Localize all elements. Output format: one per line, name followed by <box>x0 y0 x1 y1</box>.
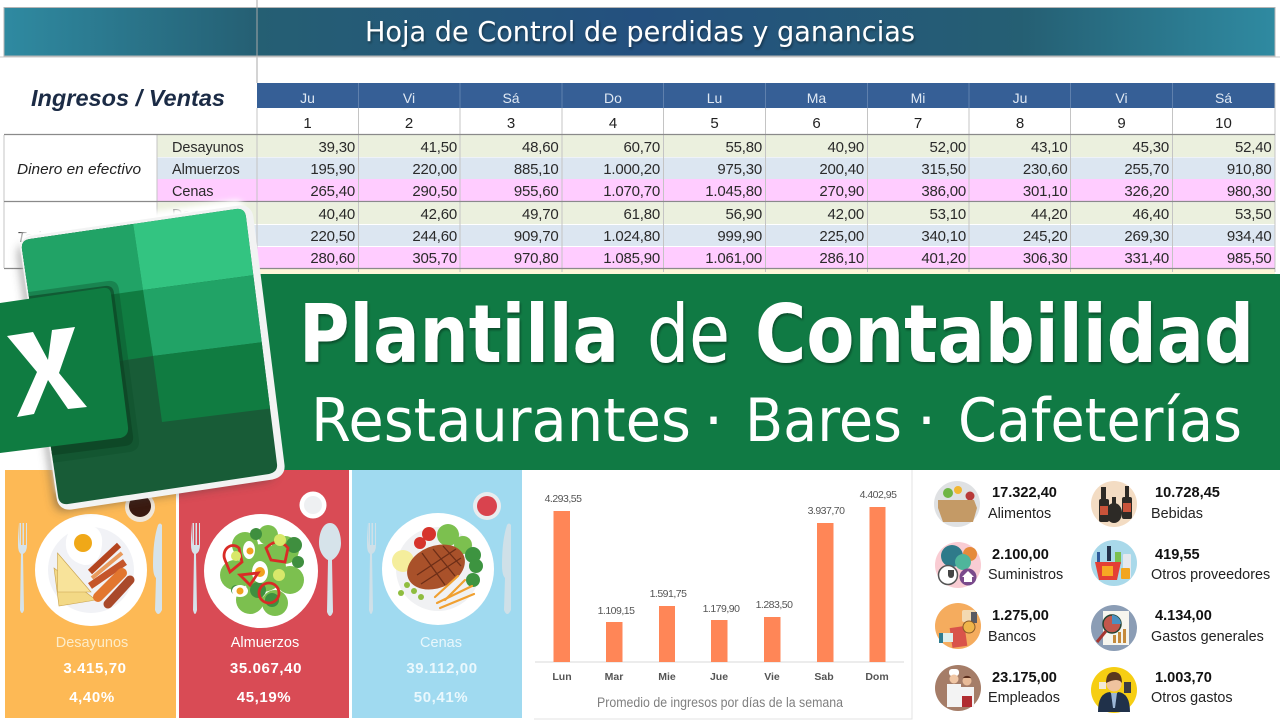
row: efectivo cenas <box>310 183 1272 200</box>
row: efectivo almuerzos: 195,90 <box>310 161 355 178</box>
row: tarjeta almuerzos: 1.024,80 <box>603 228 660 245</box>
label: cenas values: Cenas <box>420 635 462 651</box>
icon: fork <box>191 523 200 614</box>
table header: day numbers: 5 <box>710 115 719 132</box>
item: empleados: 23.175,00 <box>992 670 1057 686</box>
row: efectivo desayunos: 41,50 <box>420 139 457 156</box>
icon: sauce <box>473 492 501 520</box>
bar value labels <box>545 489 897 617</box>
bar value labels: 1.283,50 <box>756 599 793 611</box>
row: tarjeta desayunos: 61,80 <box>623 206 660 223</box>
label: desayunos values: 4,40% <box>69 689 115 706</box>
table header: day numbers <box>303 115 1232 132</box>
banner headline <box>299 288 1254 381</box>
item: empleados <box>935 665 1060 711</box>
bar value labels: 4.402,95 <box>860 489 897 501</box>
row: efectivo desayunos: 43,10 <box>1031 139 1068 156</box>
label: cenas values: 39.112,00 <box>406 660 478 677</box>
icon: fork <box>367 523 376 614</box>
banner subtitle: Bares <box>745 386 902 456</box>
label: desayunos values <box>56 635 128 706</box>
row: tarjeta cenas: 286,10 <box>819 250 864 267</box>
label: desayunos values: Desayunos <box>56 635 128 651</box>
row: tarjeta cenas: 305,70 <box>412 250 457 267</box>
table header: days of the week: Ma <box>807 90 826 106</box>
item: suministros: Suministros <box>988 567 1063 583</box>
row: efectivo almuerzos: 975,30 <box>717 161 762 178</box>
row: efectivo desayunos: 52,00 <box>929 139 966 156</box>
item: suministros <box>935 542 1063 588</box>
green banner <box>250 274 1280 470</box>
table header: days of the week: Vi <box>403 90 415 106</box>
row: efectivo desayunos <box>318 139 1272 156</box>
row labels: Almuerzos <box>172 162 240 178</box>
item: alimentos: 17.322,40 <box>992 485 1057 501</box>
row: efectivo almuerzos: 230,60 <box>1023 161 1068 178</box>
row: tarjeta desayunos: 49,70 <box>522 206 558 223</box>
icon: knife <box>502 524 511 614</box>
banner headline: de <box>647 288 730 381</box>
item: otros gastos: 1.003,70 <box>1155 670 1212 686</box>
label: almuerzos values: 35.067,40 <box>230 660 302 677</box>
row: tarjeta cenas: 985,50 <box>1227 250 1272 267</box>
panel: cenas <box>352 470 522 718</box>
heading: ingresos / ventas: Ingresos / Ventas <box>31 85 225 111</box>
table header: day numbers: 9 <box>1117 115 1126 132</box>
icon: spoon <box>319 523 341 616</box>
row: tarjeta desayunos: 42,60 <box>420 206 457 223</box>
label: almuerzos values: Almuerzos <box>231 635 299 651</box>
row: tarjeta almuerzos <box>310 228 1272 245</box>
bar value labels: 4.293,55 <box>545 493 582 505</box>
item: bancos: 1.275,00 <box>992 608 1049 624</box>
row: tarjeta desayunos: 56,90 <box>725 206 762 223</box>
logo x tile <box>0 288 128 453</box>
item: otros gastos <box>1091 667 1233 713</box>
row labels: Desayunos <box>172 140 244 156</box>
row: tarjeta cenas: 1.061,00 <box>705 250 762 267</box>
row: tarjeta cenas: 280,60 <box>310 250 355 267</box>
row: tarjeta desayunos: 42,00 <box>827 206 864 223</box>
chart: promedio de ingresos <box>522 470 912 719</box>
bar value labels: 3.937,70 <box>808 505 845 517</box>
table header: days of the week: Sá <box>1215 90 1232 106</box>
icon: salad plate <box>204 514 318 628</box>
row labels: Cenas <box>172 251 213 267</box>
item: gastos generales <box>1091 605 1264 651</box>
row: tarjeta desayunos: 40,40 <box>318 206 355 223</box>
banner subtitle: Restaurantes <box>311 386 691 456</box>
row group label: tarjeta: Tarjeta <box>17 230 61 246</box>
row: tarjeta cenas: 401,20 <box>921 250 966 267</box>
row: efectivo cenas: 265,40 <box>310 183 355 200</box>
income table <box>4 83 1275 274</box>
item: suministros: 2.100,00 <box>992 547 1049 563</box>
icon: fork <box>18 523 27 613</box>
label: almuerzos values: 45,19% <box>237 689 291 706</box>
axis labels: Sab <box>814 671 834 683</box>
item: otros proveedores <box>1091 540 1270 586</box>
row: efectivo almuerzos <box>310 161 1272 178</box>
row: efectivo cenas: 326,20 <box>1124 183 1169 200</box>
row labels: Almuerzos <box>172 229 240 245</box>
table header: day numbers: 7 <box>914 115 922 132</box>
bar value labels: 1.179,90 <box>703 603 740 615</box>
banner subtitle: · <box>704 386 723 456</box>
label: cenas values <box>406 635 478 706</box>
chart caption: Promedio de ingresos por días de la semana <box>597 695 843 710</box>
row: tarjeta almuerzos: 225,00 <box>819 228 864 245</box>
row: tarjeta cenas: 970,80 <box>514 250 558 267</box>
item: otros gastos: Otros gastos <box>1151 690 1233 706</box>
row: tarjeta almuerzos: 999,90 <box>717 228 762 245</box>
icon: knife <box>153 524 162 614</box>
axis labels: Mar <box>605 671 623 683</box>
banner headline: Plantilla <box>299 288 619 381</box>
label: desayunos values: 3.415,70 <box>63 660 127 677</box>
row: efectivo cenas: 301,10 <box>1023 183 1068 200</box>
row labels <box>172 140 244 267</box>
row labels: Desayunos <box>172 207 244 223</box>
row: efectivo desayunos: 60,70 <box>623 139 660 156</box>
banner subtitle: · <box>917 386 936 456</box>
row: tarjeta almuerzos: 909,70 <box>514 228 558 245</box>
row backgrounds <box>4 83 1275 274</box>
table header: days of the week <box>257 83 1275 108</box>
row: tarjeta desayunos: 53,50 <box>1235 206 1272 223</box>
banner subtitle <box>311 386 1242 456</box>
item: bancos <box>935 603 1049 649</box>
icon: steak plate <box>382 513 494 625</box>
row: tarjeta cenas: 331,40 <box>1124 250 1169 267</box>
table header: day numbers: 6 <box>812 115 821 132</box>
row: tarjeta almuerzos: 245,20 <box>1023 228 1068 245</box>
table header: days of the week: Sá <box>502 90 520 106</box>
table header: day numbers: 3 <box>507 115 515 132</box>
panel: desayunos <box>5 470 176 718</box>
row: efectivo cenas: 386,00 <box>921 183 966 200</box>
item: bebidas: 10.728,45 <box>1155 485 1220 501</box>
axis labels: Dom <box>865 671 889 683</box>
row: efectivo cenas: 1.070,70 <box>603 183 660 200</box>
bars <box>554 507 886 662</box>
row: tarjeta almuerzos: 244,60 <box>412 228 457 245</box>
panel: expense summary <box>934 481 1270 713</box>
row: tarjeta cenas: 1.085,90 <box>603 250 660 267</box>
item: gastos generales: 4.134,00 <box>1155 608 1212 624</box>
row group label: dinero en efectivo: Dinero en efectivo <box>17 162 141 178</box>
table header: day numbers: 2 <box>405 115 413 132</box>
item: bancos: Bancos <box>988 629 1036 645</box>
title bar <box>0 0 1280 83</box>
row: efectivo cenas: 1.045,80 <box>705 183 762 200</box>
row: efectivo desayunos: 55,80 <box>725 139 762 156</box>
label: cenas values: 50,41% <box>414 689 468 706</box>
row: tarjeta cenas <box>310 250 1272 267</box>
row: tarjeta cenas: 306,30 <box>1023 250 1068 267</box>
item: gastos generales: Gastos generales <box>1151 629 1264 645</box>
table header: day numbers: 10 <box>1215 115 1232 132</box>
table header: days of the week: Mi <box>911 90 925 106</box>
row: tarjeta desayunos: 46,40 <box>1132 206 1169 223</box>
table header: day numbers: 1 <box>303 115 312 132</box>
row: efectivo almuerzos: 910,80 <box>1227 161 1272 178</box>
item: bebidas: Bebidas <box>1151 506 1203 522</box>
row: tarjeta almuerzos: 269,30 <box>1124 228 1169 245</box>
row: tarjeta desayunos: 44,20 <box>1031 206 1068 223</box>
item: alimentos: Alimentos <box>988 506 1051 522</box>
axis labels <box>552 671 889 683</box>
icon: coffee cup <box>125 492 155 522</box>
item: alimentos <box>934 481 1057 527</box>
row: efectivo desayunos: 48,60 <box>522 139 558 156</box>
icon: breakfast plate <box>35 514 147 626</box>
row: efectivo almuerzos: 220,00 <box>412 161 457 178</box>
bar value labels: 1.591,75 <box>650 588 687 600</box>
row: efectivo cenas: 290,50 <box>412 183 457 200</box>
logo sheet <box>22 208 278 504</box>
row: efectivo almuerzos: 885,10 <box>514 161 558 178</box>
table header: days of the week: Ju <box>1013 90 1027 106</box>
axis labels: Vie <box>764 671 780 683</box>
item: bebidas <box>1091 481 1220 527</box>
table header: day numbers: 4 <box>609 115 617 132</box>
panel: almuerzos <box>179 470 349 718</box>
banner subtitle: Cafeterías <box>958 386 1242 456</box>
row labels: Cenas <box>172 184 213 200</box>
row: efectivo desayunos: 40,90 <box>827 139 864 156</box>
row: efectivo almuerzos: 200,40 <box>819 161 864 178</box>
table header: days of the week: Lu <box>707 90 722 106</box>
row: tarjeta almuerzos: 220,50 <box>310 228 355 245</box>
row: tarjeta almuerzos: 340,10 <box>921 228 966 245</box>
axis labels: Lun <box>552 671 572 683</box>
row: efectivo desayunos: 45,30 <box>1132 139 1169 156</box>
table header: days of the week: Ju <box>300 90 315 106</box>
table header: days of the week: Vi <box>1115 90 1128 106</box>
table header: days of the week: Do <box>604 90 622 106</box>
row: efectivo almuerzos: 255,70 <box>1124 161 1169 178</box>
row: efectivo cenas: 980,30 <box>1227 183 1272 200</box>
row: efectivo cenas: 955,60 <box>514 183 558 200</box>
row: tarjeta desayunos <box>318 206 1272 223</box>
excel logo <box>0 190 300 520</box>
row: efectivo almuerzos: 1.000,20 <box>603 161 660 178</box>
row: efectivo cenas: 270,90 <box>819 183 864 200</box>
bar value labels: 1.109,15 <box>598 605 635 617</box>
icon: side dish <box>300 492 326 518</box>
row: tarjeta almuerzos: 934,40 <box>1227 228 1272 245</box>
axis labels: Jue <box>710 671 728 683</box>
row: efectivo desayunos: 52,40 <box>1235 139 1272 156</box>
row: efectivo desayunos: 39,30 <box>318 139 355 156</box>
item: empleados: Empleados <box>988 690 1060 706</box>
table header: day numbers: 8 <box>1016 115 1024 132</box>
item: otros proveedores: 419,55 <box>1155 547 1200 563</box>
row: efectivo almuerzos: 315,50 <box>921 161 966 178</box>
axis labels: Mie <box>658 671 676 683</box>
item: otros proveedores: Otros proveedores <box>1151 567 1270 583</box>
title bar: Hoja de Control de perdidas y ganancias <box>365 15 915 48</box>
row: tarjeta desayunos: 53,10 <box>929 206 966 223</box>
label: almuerzos values <box>230 635 302 706</box>
